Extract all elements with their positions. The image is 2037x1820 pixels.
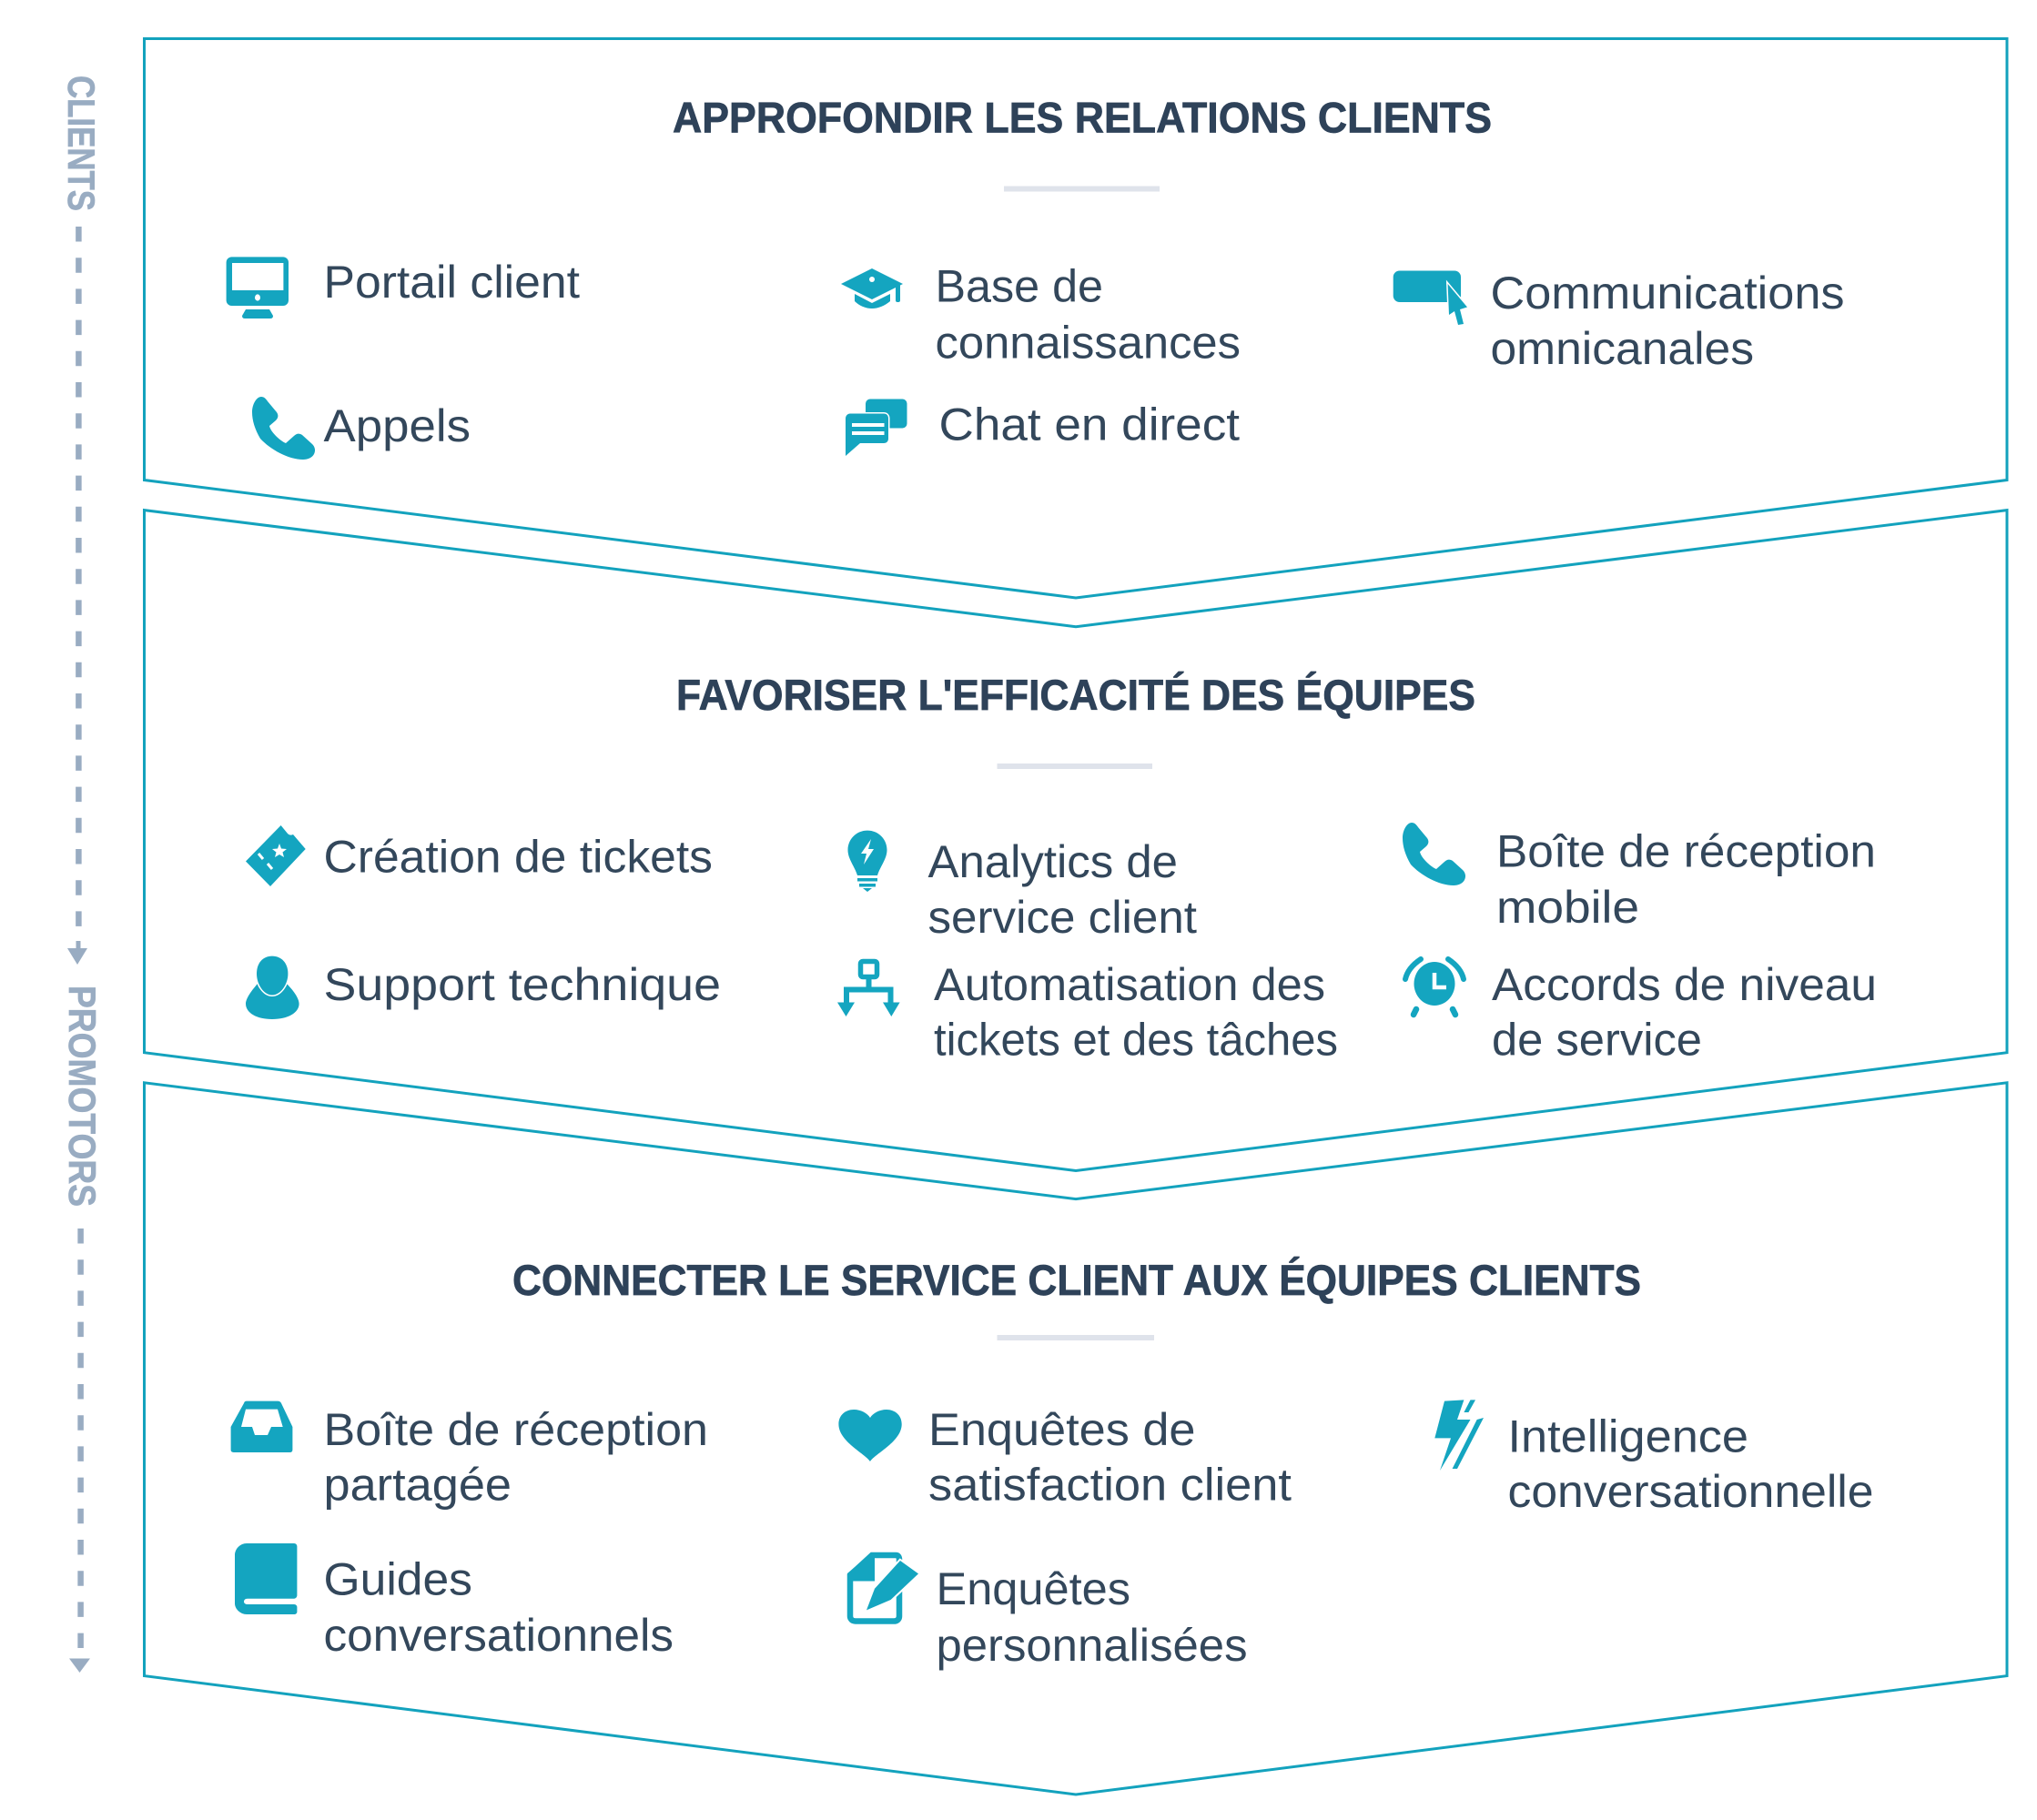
icon: book (235, 1543, 297, 1614)
heading: FAVORISER L'EFFICACITÉ DES ÉQUIPES (676, 671, 1475, 719)
icon: click on channel (1393, 271, 1467, 325)
text: boîte de réception mobile: Boîte de réception (1496, 826, 1876, 877)
text: enquêtes de satisfaction client: satisfaction client (928, 1460, 1292, 1511)
icon: inbox tray (231, 1401, 292, 1452)
icon: monitor (227, 257, 289, 318)
text: guides conversationnels (324, 1554, 674, 1661)
text: boîte de réception mobile (1496, 826, 1876, 933)
text: guides conversationnels: conversationnels (324, 1610, 674, 1661)
text: analytics de service client (928, 836, 1197, 943)
text: base de connaissances (936, 260, 1241, 368)
text: intelligence conversationnelle: conversationnelle (1507, 1466, 1873, 1517)
side axis: clients to promotors (60, 76, 104, 1673)
text: création de tickets: Création de tickets (324, 831, 713, 882)
icon: alarm clock (1405, 959, 1464, 1015)
text: accords de niveau de service (1492, 959, 1877, 1066)
text: intelligence conversationnelle (1507, 1410, 1873, 1517)
icon: lightning bolts (1434, 1400, 1484, 1471)
text: boîte de réception partagée: Boîte de réception (324, 1404, 708, 1455)
text: communications omnicanales (1491, 268, 1844, 374)
text: enquêtes de satisfaction client (928, 1404, 1292, 1511)
text: accords de niveau de service: de service (1492, 1015, 1702, 1066)
icon: graduation cap (841, 268, 903, 308)
icon: phone (1403, 823, 1465, 885)
text: base de connaissances: Base de (936, 260, 1103, 311)
icon: light bulb (848, 831, 887, 892)
icon: ticket (246, 825, 306, 886)
text: enquêtes de satisfaction client: Enquêtes de (928, 1404, 1196, 1455)
panel outline (144, 1083, 2007, 1795)
icon: heart (838, 1410, 902, 1461)
panel: favoriser l'efficacité des équipes (144, 511, 2007, 1170)
icon: person (246, 956, 299, 1019)
text: automatisation des tickets et des tâches: Automatisation des (934, 959, 1325, 1010)
text: portail client: Portail client (324, 257, 580, 308)
text: enquêtes personnalisées (936, 1563, 1247, 1671)
text: boîte de réception mobile: mobile (1496, 882, 1639, 933)
text: boîte de réception partagée: partagée (324, 1460, 512, 1511)
label: promotors: PROMOTORS (61, 986, 104, 1207)
divider (998, 763, 1152, 769)
icon: automation flow (837, 961, 900, 1016)
divider (998, 1335, 1154, 1340)
label: clients: CLIENTS (60, 76, 103, 211)
text: automatisation des tickets et des tâches: tickets et des tâches (934, 1015, 1338, 1066)
text: enquêtes personnalisées: personnalisées (936, 1620, 1247, 1671)
panel: approfondir les relations clients (144, 38, 2007, 598)
text: automatisation des tickets et des tâches (934, 959, 1338, 1066)
icon: phone (252, 397, 315, 460)
text: support technique: Support technique (324, 959, 721, 1010)
panel: connecter le service client aux équipes clients (144, 1083, 2007, 1795)
text: base de connaissances: connaissances (936, 317, 1241, 368)
divider (1004, 186, 1160, 191)
dashed arrow: down to end (69, 1228, 90, 1673)
text: chat en direct: Chat en direct (939, 399, 1240, 450)
icon: chat bubbles (846, 399, 907, 456)
text: appels: Appels (324, 400, 471, 451)
icon: document with pencil (847, 1552, 918, 1622)
text: communications omnicanales: Communications (1491, 268, 1844, 318)
panel outline (144, 511, 2007, 1170)
text: analytics de service client: service client (928, 892, 1197, 943)
panel outline (144, 38, 2007, 598)
dashed arrow: clients to promotors (67, 227, 87, 965)
text: communications omnicanales: omnicanales (1491, 323, 1754, 374)
text: guides conversationnels: Guides (324, 1554, 472, 1605)
text: accords de niveau de service: Accords de niveau (1492, 959, 1877, 1010)
text: boîte de réception partagée (324, 1404, 708, 1511)
text: analytics de service client: Analytics de (928, 836, 1178, 887)
text: intelligence conversationnelle: Intelligence (1507, 1410, 1748, 1461)
text: enquêtes personnalisées: Enquêtes (936, 1563, 1130, 1614)
heading: APPROFONDIR LES RELATIONS CLIENTS (673, 93, 1492, 142)
heading: CONNECTER LE SERVICE CLIENT AUX ÉQUIPES CLIENTS (512, 1256, 1641, 1304)
